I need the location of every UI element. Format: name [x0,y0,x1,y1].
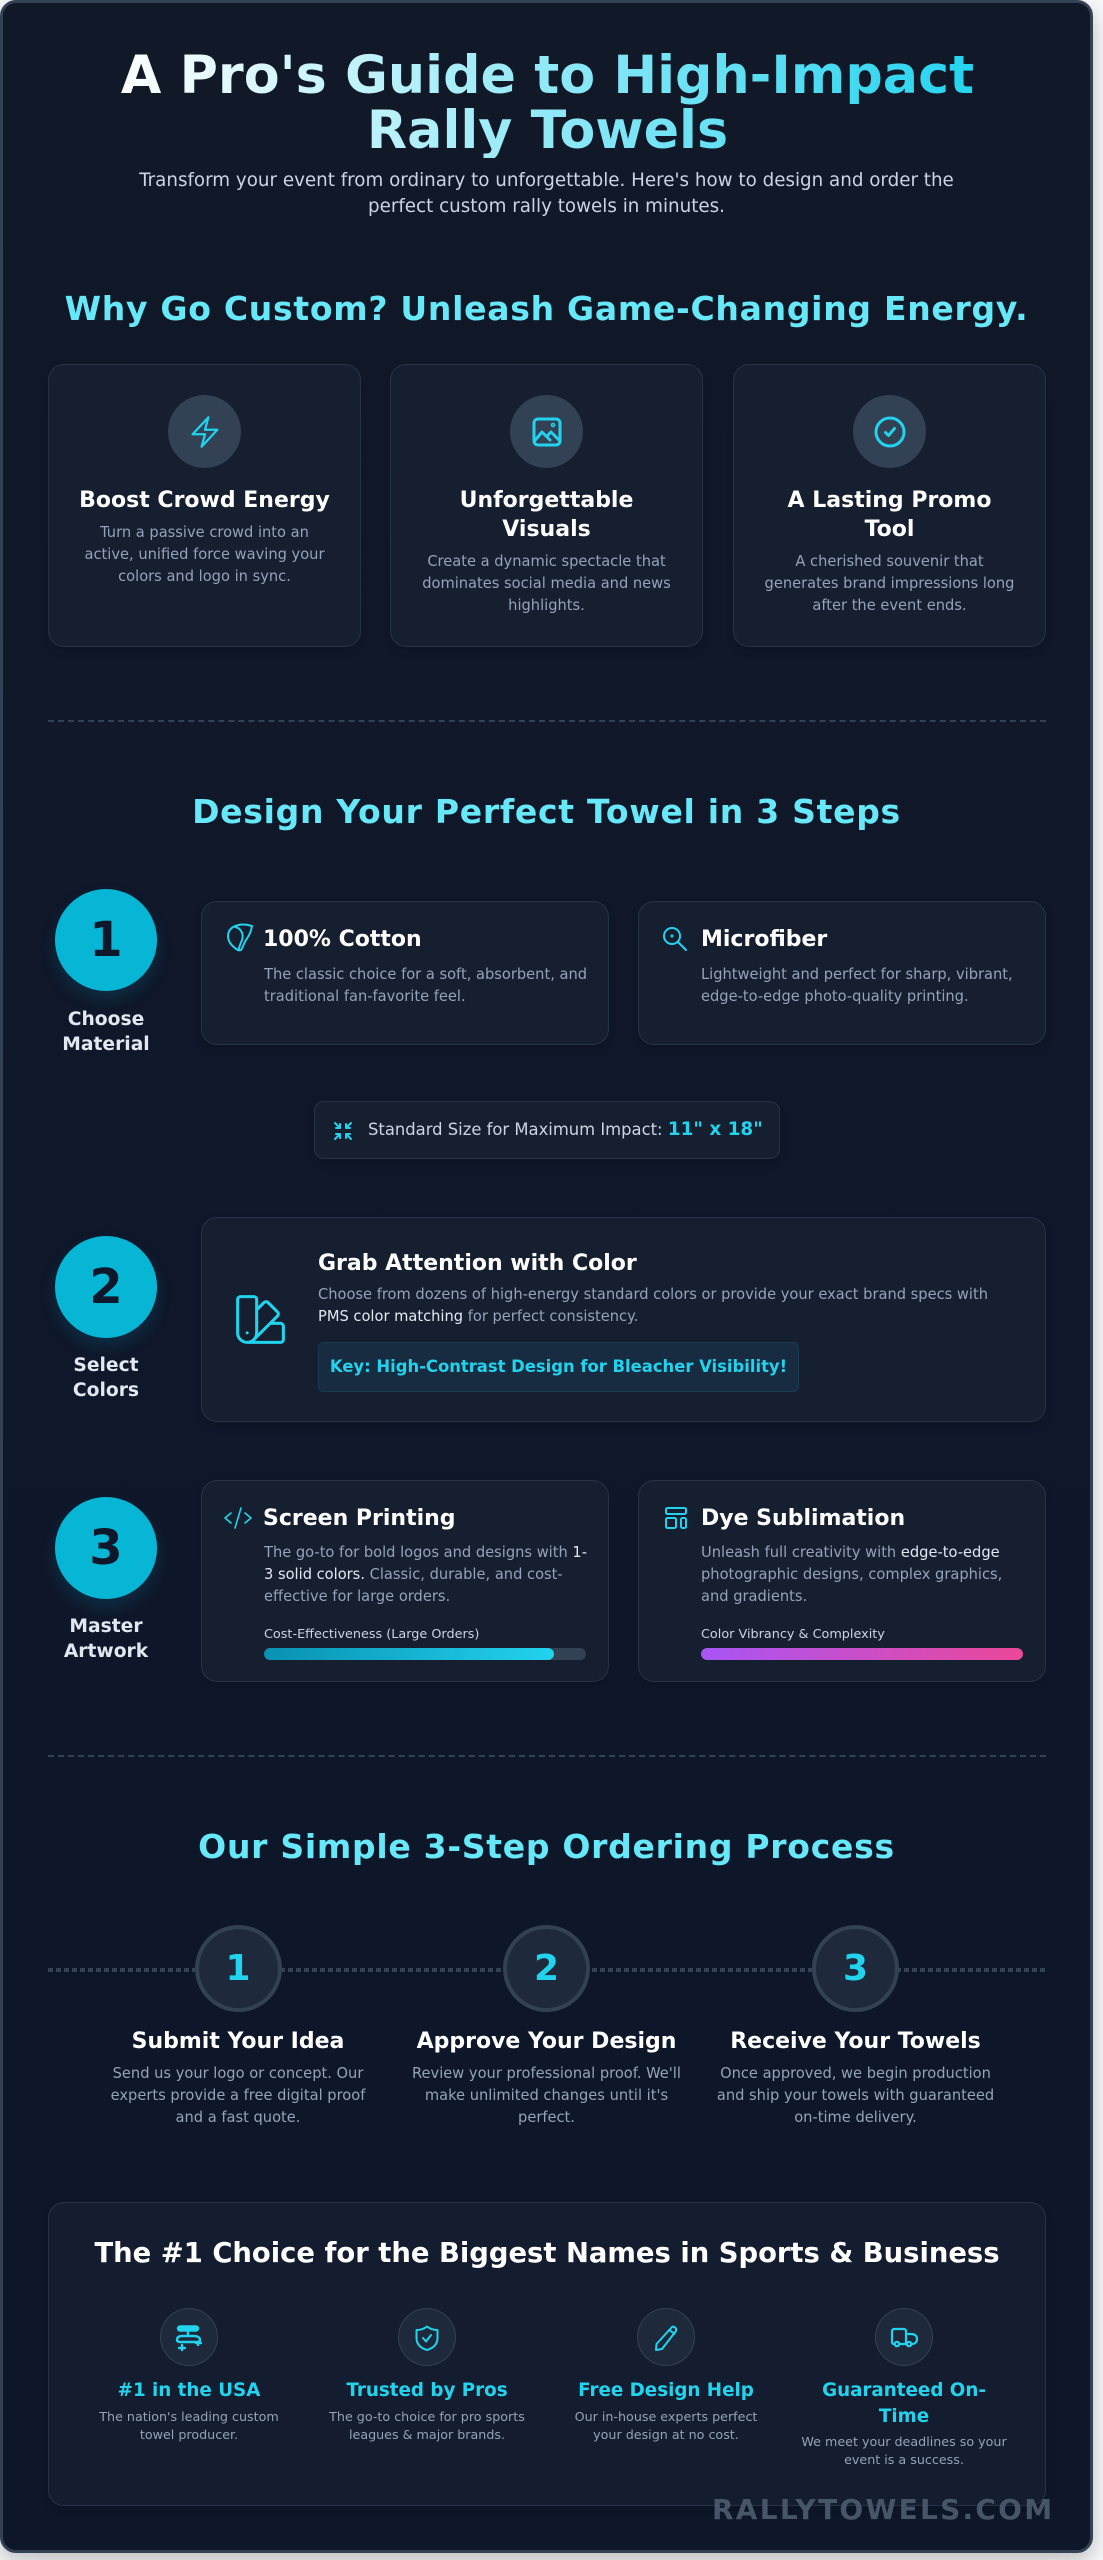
card text: highlights. [508,597,585,614]
panel: cotton [201,901,609,1045]
step 2 label [73,1355,139,1401]
feature text: event is a success. [844,2452,964,2467]
icon: swatch [236,1295,285,1344]
feature title: #1 in the USA [118,2380,260,2401]
icon: code [224,1507,252,1529]
card text: Create a dynamic spectacle that [427,553,666,570]
icon: badge [160,2308,218,2366]
step text: Review your professional proof. We'll [412,2065,681,2082]
step text: Send us your logo or concept. Our [113,2065,363,2082]
bar label: Color Vibrancy & Complexity [701,1627,885,1642]
progress bar: cost effectiveness 90% [264,1648,586,1660]
step 3 label [64,1616,148,1662]
panel: boost crowd energy [48,364,361,647]
step 1 number: 1 [89,912,123,968]
card text [422,553,671,614]
title: A Pro's Guide to High-Impact [121,44,974,106]
step 3 label: Artwork [64,1641,148,1662]
step 2 label: Colors [73,1380,139,1401]
step text: make unlimited changes until it's [425,2087,668,2104]
heading: design steps: Design Your Perfect Towel in 3 Steps [192,792,901,831]
bar label: Cost-Effectiveness (Large Orders) [264,1627,479,1642]
card text: A cherished souvenir that [795,553,984,570]
card text [85,524,324,585]
method text: and gradients. [701,1588,807,1605]
step 2 label: Select [73,1355,139,1376]
icon: pencil [637,2308,695,2366]
step circle: 3 [843,1948,868,1989]
icon: cotton [227,924,253,952]
feature text: towel producer. [140,2427,238,2442]
feature text [801,2434,1007,2467]
step title: Submit Your Idea [132,2029,344,2054]
card text: Turn a passive crowd into an [100,524,309,541]
step 1 number [55,889,157,991]
step title: Receive Your Towels [730,2029,981,2054]
option text: The classic choice for a soft, absorbent, and [264,966,587,983]
feature text: We meet your deadlines so your [801,2434,1007,2449]
title [111,48,984,158]
feature: trusted [329,2308,525,2442]
color text: PMS color matching for perfect consistency. [318,1308,638,1325]
process step 3 [717,1925,994,2126]
panel title: The #1 Choice for the Biggest Names in Sports & Business [94,2238,1000,2269]
method text: The go-to for bold logos and designs with 1- [264,1544,587,1561]
card text: active, unified force waving your [85,546,324,563]
method text [701,1544,1002,1605]
step circle: 2 [534,1948,559,1989]
feature text [575,2409,758,2442]
color title: Grab Attention with Color [318,1250,637,1276]
size callout [314,1101,780,1159]
step title: Approve Your Design [417,2029,676,2054]
method text: effective for large orders. [264,1588,450,1605]
card title [460,488,633,542]
step 1 label: Choose [68,1009,144,1030]
method text: Unleash full creativity with edge-to-edge [701,1544,1000,1561]
icon: truck [875,2308,933,2366]
panel: number one choice [48,2202,1046,2506]
watermark: RALLYTOWELS.COM [712,2493,1054,2526]
title: Rally Towels [367,100,728,160]
card text: colors and logo in sync. [118,568,291,585]
step 1 label: Material [62,1034,150,1055]
step text: experts provide a free digital proof [111,2087,365,2104]
feature: design help [575,2308,758,2442]
icon: magnifier [663,927,687,951]
card text: dominates social media and news [422,575,671,592]
card title: Visuals [502,517,591,542]
icon: lightning bolt [168,395,241,468]
feature title: Free Design Help [578,2380,754,2401]
card title: Tool [865,517,914,542]
size text: Standard Size for Maximum Impact: 11" x 18" [368,1119,763,1140]
step 3 number: 3 [89,1520,123,1576]
option text: edge-to-edge photo-quality printing. [701,988,969,1005]
key callout: Key: High-Contrast Design for Bleacher Visibility! [330,1357,787,1376]
icon: image [510,395,583,468]
panel: unforgettable visuals [390,364,703,647]
step text [412,2065,681,2126]
feature text: your design at no cost. [593,2427,739,2442]
icon: layout [665,1507,687,1529]
method text: 3 solid colors. Classic, durable, and cost- [264,1566,563,1583]
card text [765,553,1014,614]
panel: color [201,1217,1046,1422]
feature: on-time [801,2308,1007,2467]
step circle: 1 [225,1948,251,1989]
card text: after the event ends. [812,597,967,614]
feature: number one [99,2308,279,2442]
card text: generates brand impressions long [765,575,1014,592]
icon: shield [398,2308,456,2366]
process step 2 [412,1925,681,2126]
feature text [329,2409,525,2442]
feature title: Time [879,2406,929,2427]
subtitle: Transform your event from ordinary to unforgettable. Here's how to design and order the [139,170,954,191]
progress bar: color vibrancy 100% [701,1648,1023,1660]
option title: 100% Cotton [263,926,422,952]
card title [788,488,991,542]
subtitle [139,170,954,216]
method text [264,1544,587,1605]
option text [264,966,587,1005]
feature title: Guaranteed On- [822,2380,986,2401]
heading: ordering process: Our Simple 3-Step Ordering Process [198,1827,895,1866]
method text: photographic designs, complex graphics, [701,1566,1002,1583]
icon: check circle [853,395,926,468]
feature text: Our in-house experts perfect [575,2409,757,2424]
icon: compress arrows [334,1122,352,1140]
panel: lasting promo tool [733,364,1046,647]
step 1 label [62,1009,150,1055]
option text: Lightweight and perfect for sharp, vibrant, [701,966,1013,983]
card title: Boost Crowd Energy [79,488,330,513]
color text: Choose from dozens of high-energy standard colors or provide your exact brand specs with [318,1286,988,1303]
key callout [318,1342,799,1392]
step text: and ship your towels with guaranteed [717,2087,994,2104]
step text [111,2065,366,2126]
feature text [99,2409,279,2442]
step circle [503,1925,590,2012]
step text [717,2065,994,2126]
feature text: The nation's leading custom [99,2409,279,2424]
option title: Microfiber [701,926,827,952]
option text: traditional fan-favorite feel. [264,988,466,1005]
panel: screen printing [201,1480,609,1682]
panel: dye sublimation [638,1480,1046,1682]
option text [701,966,1013,1005]
feature text: leagues & major brands. [349,2427,505,2442]
step circle [812,1925,899,2012]
subtitle: perfect custom rally towels in minutes. [368,196,725,216]
color text [318,1286,988,1325]
step circle [194,1925,282,2012]
feature text: The go-to choice for pro sports [329,2409,525,2424]
method title: Screen Printing [263,1506,456,1530]
process step 1 [111,1925,366,2126]
step 2 number: 2 [89,1259,123,1315]
step 3 number [55,1497,157,1599]
step 2 number [55,1236,157,1338]
step text: Once approved, we begin production [720,2065,991,2082]
step text: perfect. [518,2109,575,2126]
feature title: Trusted by Pros [346,2380,508,2401]
step text: and a fast quote. [176,2109,300,2126]
timeline dashed line [48,1968,1046,1972]
step 3 label: Master [69,1616,143,1637]
panel: microfiber [638,901,1046,1045]
card title: Unforgettable [460,488,633,513]
heading: why custom: Why Go Custom? Unleash Game-Changing Energy. [65,289,1028,328]
method title: Dye Sublimation [701,1506,905,1530]
feature title [822,2380,986,2427]
step text: on-time delivery. [794,2109,917,2126]
card title: A Lasting Promo [788,488,991,513]
